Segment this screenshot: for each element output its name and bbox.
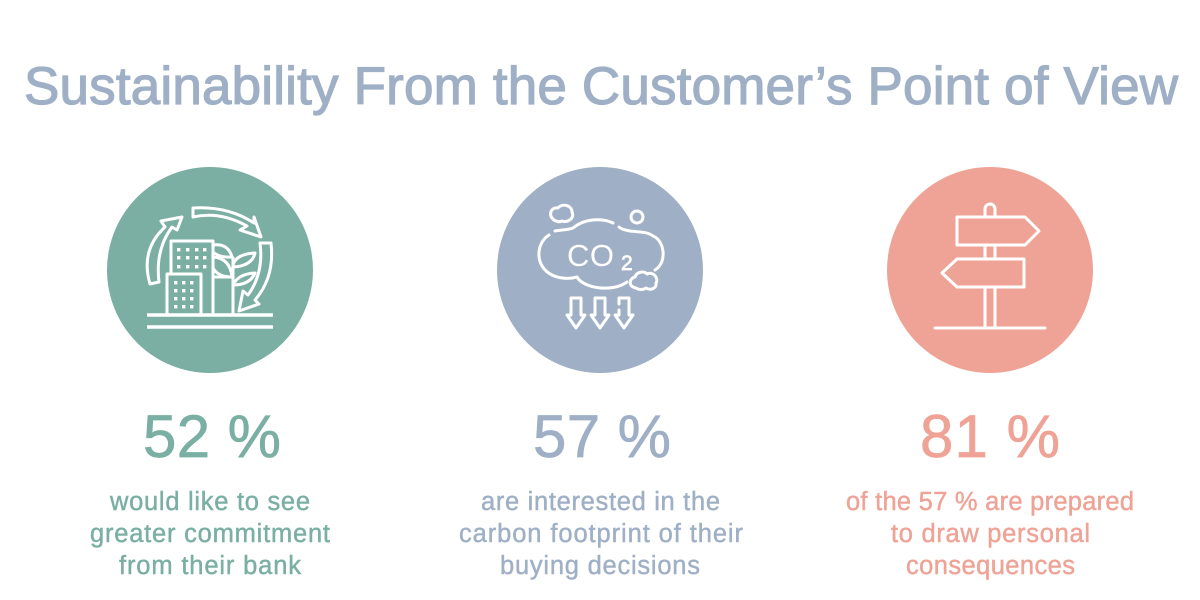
text: are interested in the carbon footprint: carbon footprint of their [459,520,744,548]
icon circle: blue [497,167,703,373]
icon: city with leaves and recycling arrows [147,208,273,327]
icon: CO2 cloud with down arrows: CO [567,238,614,273]
panel: bank commitment [90,167,330,580]
icon: CO2 cloud with down arrows [539,205,663,328]
panel: personal consequences [846,167,1134,580]
text: of the 57 % are prepared [846,488,1134,580]
text: of the 57 % are prepared: of the 57 % are prepared [846,488,1134,516]
text: would like to see greater commitment: would like to see [109,488,310,516]
text: would like to see greater commitment: from their bank [119,552,301,580]
icon: CO2 cloud with down arrows: 2 [621,252,633,275]
icon: signpost [935,204,1045,328]
text: of the 57 % are prepared: to draw personal [891,520,1090,548]
title: Sustainability From the Customer’s Point of View [24,57,1179,116]
statistic: 57 %: 57 % [533,403,671,470]
panel: carbon footprint [459,167,744,580]
text: are interested in the carbon footprint: buying decisions [500,552,700,580]
statistic: 81 %: 81 % [920,403,1060,470]
text: would like to see greater commitment [90,488,330,580]
statistic: 52 %: 52 % [143,403,281,470]
icon circle: green [107,167,313,373]
text: of the 57 % are prepared: consequences [906,552,1075,580]
icon circle: salmon [887,167,1093,373]
text: are interested in the carbon footprint: are interested in the [481,488,720,516]
text: are interested in the carbon footprint [459,488,744,580]
text: would like to see greater commitment: greater commitment [90,520,330,548]
